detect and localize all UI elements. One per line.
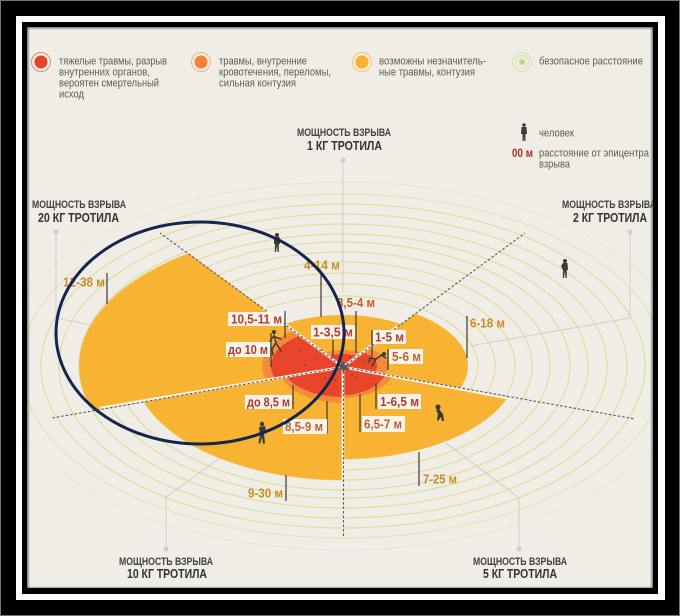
heading: 10 kg: МОЩНОСТЬ ВЗРЫВА (119, 556, 213, 568)
safe distance rings (0, 182, 680, 550)
heading: 2 kg (562, 199, 656, 225)
heading: 5 kg (473, 556, 567, 581)
label: 4-14 м: 4-14 м (304, 258, 340, 272)
label: 6,5-7 м: 6,5-7 м (364, 418, 402, 432)
label: до 8,5 м: до 8,5 м (247, 396, 290, 410)
measurement lines (107, 273, 467, 501)
legend item: distance: расстояние от эпицентра (539, 148, 650, 160)
heading: 2 kg: МОЩНОСТЬ ВЗРЫВА (562, 199, 656, 211)
label: 1-3,5 м: 1-3,5 м (313, 326, 353, 340)
label: 8,5-9 м: 8,5-9 м (285, 420, 323, 434)
legend item: injuries and fractures: кровотечения, переломы, (219, 66, 331, 78)
legend item: severe injuries: вероятен смертельный (59, 78, 159, 90)
person: 2 kg zone, falling (369, 352, 386, 366)
legend item: safe distance (512, 52, 643, 72)
legend item: injuries and fractures: сильная контузия (219, 78, 296, 90)
legend item: injuries and fractures (192, 52, 331, 90)
legend item: severe injuries (32, 52, 167, 100)
legend item: severe injuries: тяжелые травмы, разрыв (59, 56, 167, 68)
heading: 20 kg: МОЩНОСТЬ ВЗРЫВА (32, 199, 126, 211)
distance labels (63, 258, 505, 500)
legend item: severe injuries: исход (59, 88, 84, 100)
navy highlight ellipse (56, 222, 344, 444)
blast zones: minor injuries (79, 253, 508, 480)
legend item: minor injuries: возможны незначитель- (379, 56, 486, 68)
legend item: distance (512, 146, 650, 170)
person: 10 kg sector (258, 422, 266, 444)
legend item: distance: 00 м (512, 146, 533, 160)
label: 1-5 м: 1-5 м (375, 330, 404, 344)
blast zones: injuries and fractures (262, 331, 392, 403)
heading: 1 kg: 1 КГ ТРОТИЛА (307, 138, 382, 153)
legend item: safe distance: безопасное расстояние (539, 56, 643, 68)
label: 1-6,5 м: 1-6,5 м (380, 395, 419, 409)
epicentre debris (299, 349, 366, 381)
person: 20 kg sector (270, 330, 281, 355)
legend item: person: человек (539, 128, 574, 140)
legend item: minor injuries (352, 52, 486, 78)
heading: 20 kg (32, 199, 126, 225)
heading: 20 kg: 20 КГ ТРОТИЛА (38, 210, 119, 225)
label: 10,5-11 м: 10,5-11 м (231, 312, 282, 326)
heading: 10 kg (119, 556, 213, 581)
heading: 1 kg (297, 127, 391, 153)
callout leader lines (54, 158, 632, 552)
heading: 5 kg: 5 КГ ТРОТИЛА (483, 566, 557, 581)
legend item: distance: взрыва (539, 158, 571, 170)
blast zones: severe injuries (271, 336, 384, 397)
legend item: injuries and fractures: травмы, внутренние (219, 56, 307, 68)
label: 7-25 м: 7-25 м (423, 472, 457, 486)
legend item: minor injuries: ные травмы, контузия (379, 66, 475, 78)
heading: 1 kg: МОЩНОСТЬ ВЗРЫВА (297, 127, 391, 139)
heading: 5 kg: МОЩНОСТЬ ВЗРЫВА (473, 556, 567, 568)
heading: 2 kg: 2 КГ ТРОТИЛА (573, 210, 647, 225)
label: 9-30 м: 9-30 м (248, 486, 283, 500)
person: 1 kg sector (274, 233, 280, 252)
label: до 10 м: до 10 м (228, 343, 268, 357)
label: 6-18 м: 6-18 м (470, 316, 505, 330)
person: 2 kg sector (561, 259, 568, 278)
person: 5 kg sector (436, 404, 444, 421)
people silhouettes (258, 233, 568, 444)
legend item: severe injuries: внутренних органов, (59, 66, 150, 78)
heading: 10 kg: 10 КГ ТРОТИЛА (127, 566, 207, 581)
legend (32, 52, 650, 170)
label: 3,5-4 м: 3,5-4 м (337, 296, 375, 310)
sector divider lines (52, 233, 635, 537)
label: 5-6 м: 5-6 м (392, 350, 421, 364)
label: 12-38 м: 12-38 м (63, 276, 105, 290)
legend item: person (521, 123, 574, 141)
